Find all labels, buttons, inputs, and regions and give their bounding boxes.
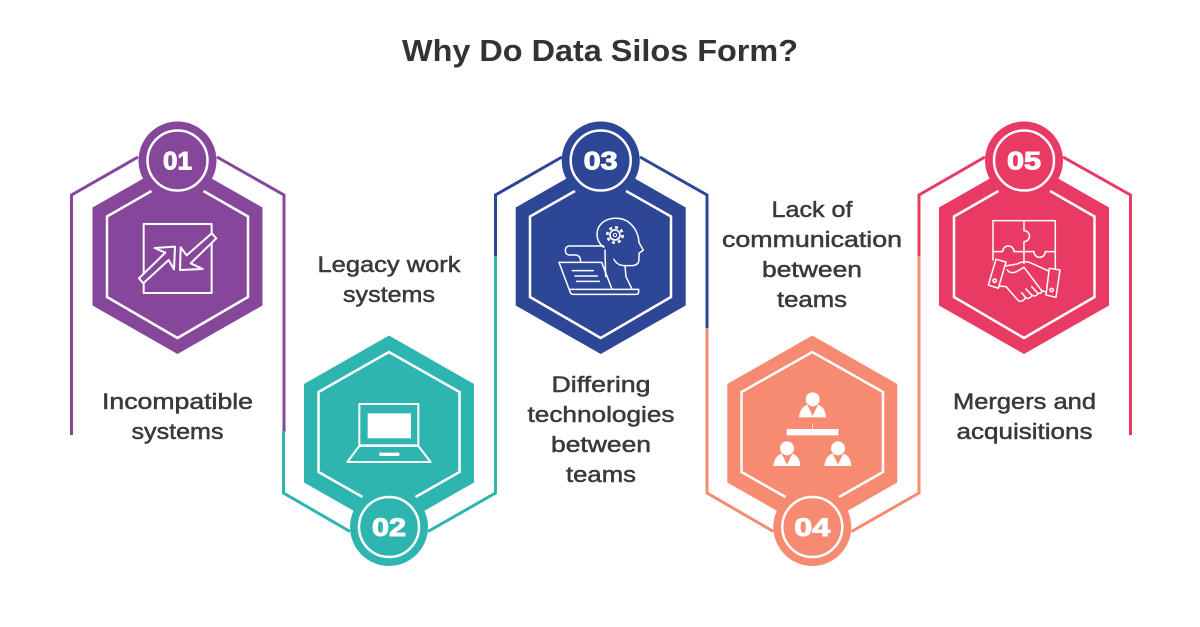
inner hexagon outline 3 (530, 191, 671, 338)
panel: step 4 lack of communication (707, 197, 919, 566)
hexagon 5 (939, 159, 1109, 354)
panel: step 2 legacy work systems (284, 252, 496, 566)
label 3: technologies (528, 402, 674, 427)
label 3 (528, 372, 674, 487)
number badge 04 (773, 488, 851, 566)
hexagon 4 (727, 336, 897, 531)
label 4: communication (722, 227, 902, 252)
number badge 05: 05 (1007, 148, 1041, 176)
label 1: Incompatible (102, 389, 253, 414)
label 4 (722, 197, 902, 312)
hexagon 1 (92, 159, 262, 354)
icon: org chart people (773, 392, 851, 466)
label 5: Mergers and (953, 389, 1096, 414)
label 3: teams (566, 462, 636, 487)
number badge 05 (985, 122, 1063, 200)
hexagon 2 (304, 336, 474, 531)
icon: head with gear and document (559, 218, 643, 294)
number badge 03 (562, 122, 640, 200)
label 3: between (551, 432, 651, 457)
inner hexagon outline 1 (107, 191, 248, 338)
number badge 02: 02 (372, 514, 406, 542)
inner hexagon outline 4 (742, 352, 883, 497)
label 1 (102, 389, 253, 444)
panel: step 5 mergers and acquisitions (919, 122, 1130, 444)
label 4: teams (777, 287, 847, 312)
number badge 01 (138, 122, 216, 200)
inner hexagon outline 2 (318, 352, 460, 497)
hexagon 3 (516, 159, 686, 354)
label 5 (953, 389, 1096, 444)
number badge 03: 03 (584, 148, 618, 176)
icon: laptop (347, 404, 431, 462)
icon: arrows in square (139, 224, 216, 293)
label 2 (318, 252, 462, 307)
number badge 01: 01 (163, 148, 192, 176)
label 4: between (762, 257, 862, 282)
label 2: Legacy work (318, 252, 462, 277)
label 3: Differing (552, 372, 650, 397)
icon: puzzle and handshake (988, 221, 1060, 301)
panel: step 3 differing technologies (496, 122, 707, 487)
number badge 04: 04 (794, 514, 830, 542)
number badge 02 (350, 488, 428, 566)
outline frame 1 (72, 157, 284, 435)
outline frame 3 (496, 157, 707, 328)
outline frame 4 (707, 256, 919, 532)
label 2: systems (343, 282, 435, 307)
inner hexagon outline 5 (954, 191, 1094, 338)
outline frame 2 (284, 256, 496, 532)
label 1: systems (132, 419, 224, 444)
panel: step 1 incompatible systems (72, 122, 284, 444)
label 4: Lack of (772, 197, 854, 222)
outline frame 5 (919, 157, 1130, 435)
label 5: acquisitions (956, 419, 1092, 444)
title: Why Do Data Silos Form? (402, 33, 798, 68)
